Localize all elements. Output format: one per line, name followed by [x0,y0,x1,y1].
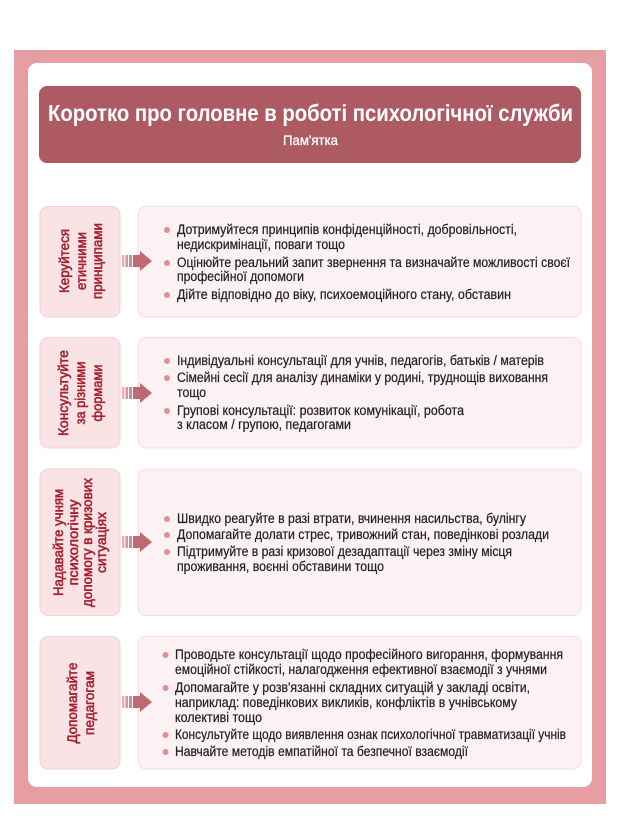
content box: ethical principles [138,206,581,317]
content box: help teachers: Консультуйте щодо виявлення ознак психологічної травматизації учнів [175,727,566,742]
arrow [122,692,152,712]
content box: ethical principles: Дотримуйтеся принципів конфіденційності, добровільності, [177,222,517,237]
content box: crisis help: Швидко реагуйте в разі втрати, вчинення насильства, булінгу [177,511,526,526]
content box: help teachers [138,636,581,769]
content box: help teachers: емоційної стійкості, налагодження ефективної взаємодії з учнями [175,662,547,677]
label box: crisis help: психологічну [65,500,81,586]
content box: help teachers: колективі тощо [175,710,262,725]
label box: ethical principles: принципами [89,223,105,299]
row 4: help teachers [40,636,581,769]
content box: crisis help: проживання, воєнні обставини тощо [177,559,384,574]
arrow [122,532,152,552]
row 2: consultation forms [40,338,581,448]
content box: crisis help: Допомагайте долати стрес, тривожний стан, поведінкові розлади [177,527,549,542]
label box: crisis help: ситуаціях [93,512,109,573]
content box: ethical principles: Дійте відповідно до віку, психоемоційного стану, обставин [177,287,511,302]
content box: help teachers: Проводьте консультації щодо професійного вигорання, формування [175,647,563,662]
header banner [39,86,581,163]
label box: consultation forms: Консультуйте [55,350,71,436]
row 3: crisis help [40,469,581,616]
subtitle: Пам'ятка [283,133,338,148]
label box: ethical principles: етичними [73,232,89,290]
content box: consultation forms [138,338,581,448]
content box: ethical principles: професійної допомоги [177,269,304,284]
content box: consultation forms: Індивідуальні консультації для учнів, педагогів, батьків / матерів [177,353,544,368]
label box: crisis help: допомогу в кризових [79,478,95,607]
content box: consultation forms: Групові консультації: розвиток комунікації, робота [177,403,464,418]
arrow [122,383,152,403]
content box: consultation forms: Сімейні сесії для аналізу динаміки у родині, труднощів виховання [177,370,548,385]
content box: help teachers: Навчайте методів емпатійної та безпечної взаємодії [175,744,468,759]
label box: help teachers: педагогам [81,671,97,735]
content box: help teachers: наприклад: поведінкових викликів, конфліктів в учнівському [175,695,517,710]
label box: help teachers [40,636,120,769]
content box: consultation forms: з класом / групою, педагогами [177,417,351,432]
label box: help teachers: Допомагайте [64,662,80,744]
inner white panel [28,63,592,787]
label box: consultation forms [40,338,120,448]
content box: crisis help: Підтримуйте в разі кризової дезадаптації через зміну місця [177,544,512,559]
label box: ethical principles: Керуйтеся [56,229,72,293]
content box: crisis help [138,469,581,616]
label box: crisis help [40,469,120,616]
content box: consultation forms: тощо [177,385,206,400]
content box: ethical principles: недискримінації, поваги тощо [177,237,345,252]
content box: ethical principles: Оцінюйте реальний запит звернення та визначайте можливості своєї [177,255,570,270]
arrow [122,251,152,271]
content box: help teachers: Допомагайте у розв'язанні складних ситуацій у закладі освіти, [175,680,530,695]
label box: ethical principles [40,206,120,317]
row 1: ethical principles [40,206,581,317]
label box: consultation forms: за різними [72,362,88,424]
label box: consultation forms: формами [89,364,105,422]
label box: crisis help: Надавайте учням [50,489,66,596]
